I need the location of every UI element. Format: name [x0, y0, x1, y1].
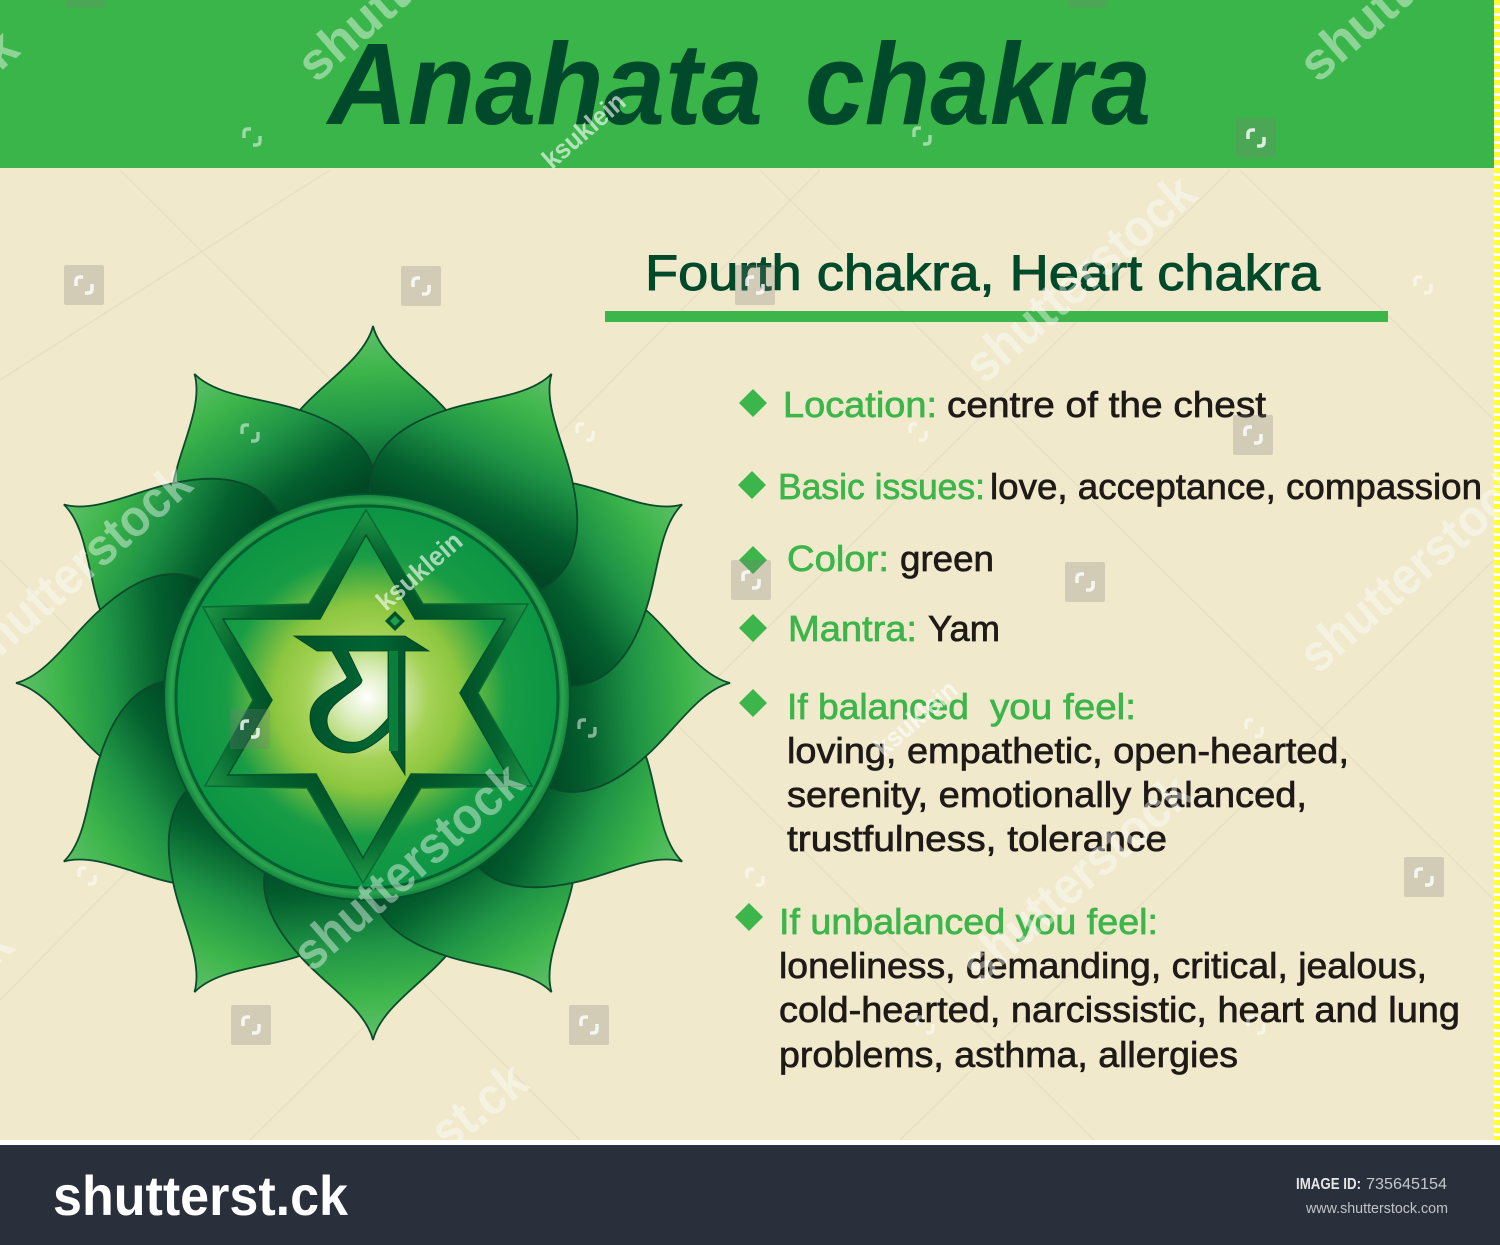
- outer ring: [164, 494, 570, 900]
- lotus petals: [9, 319, 737, 1047]
- list: basic issues: love, acceptance, compassion: [990, 466, 1482, 507]
- list: if balanced: loving, empathetic, open-hearted,: [787, 730, 1349, 771]
- watermark overlay: ksuklein: [868, 674, 963, 763]
- icon: diamond bullet: [738, 471, 766, 499]
- list: location: [739, 384, 1266, 425]
- list: if balanced: you feel:: [990, 686, 1136, 727]
- list: basic issues: Basic issues:: [778, 466, 985, 507]
- icon: diamond bullet: [739, 689, 767, 717]
- title: [325, 19, 1151, 149]
- icon: diamond bullet: [739, 614, 767, 642]
- image id: IMAGE ID:: [1296, 1176, 1361, 1193]
- list: color: [739, 538, 994, 579]
- watermark overlay: shutterstock: [954, 163, 1207, 394]
- bija mantra glyph: [294, 611, 429, 775]
- list: if balanced: trustfulness, tolerance: [787, 818, 1167, 859]
- list: mantra: Mantra:: [788, 608, 917, 649]
- image id: 735645154: [1366, 1176, 1447, 1193]
- list: mantra: Yam: [928, 608, 1000, 649]
- heading: fourth chakra: Fourth chakra, Heart chakra: [645, 245, 1320, 301]
- watermark overlay: ksuklein: [370, 526, 468, 617]
- inner disc: [176, 506, 558, 888]
- watermark overlay: ksuklein: [536, 86, 631, 175]
- list: basic issues: [738, 466, 1482, 507]
- list: color: Color:: [787, 538, 889, 579]
- glyph dot: [385, 611, 405, 631]
- list: if balanced: [739, 686, 1349, 859]
- title: Anahata: [325, 19, 763, 149]
- list: if balanced: serenity, emotionally balanced,: [787, 774, 1307, 815]
- heading underline: [605, 311, 1388, 322]
- watermark overlay: shutterstock: [950, 763, 1203, 994]
- list: if unbalanced: loneliness, demanding, critical, jealous,: [779, 945, 1427, 986]
- icon: diamond bullet: [739, 389, 767, 417]
- list: if unbalanced: cold-hearted, narcissistic, heart and lung: [779, 989, 1460, 1030]
- icon: diamond bullet: [735, 903, 763, 931]
- watermark overlay: st.ck: [420, 1051, 538, 1161]
- list: if balanced: If balanced: [787, 686, 969, 727]
- title: chakra: [805, 19, 1151, 149]
- list: location: Location:: [783, 384, 937, 425]
- image id: [1296, 1176, 1447, 1193]
- footer bar: [0, 1140, 1500, 1245]
- list: color: green: [900, 538, 994, 579]
- title banner: [0, 0, 1494, 168]
- list: mantra: [739, 608, 1000, 649]
- website: www.shutterstock.com: [1305, 1201, 1448, 1217]
- chakra mandala: [9, 319, 737, 1047]
- list: if unbalanced: If unbalanced you feel:: [779, 901, 1158, 942]
- list: if unbalanced: problems, asthma, allergies: [779, 1034, 1238, 1075]
- hexagram inner: [223, 535, 507, 858]
- watermark overlay: shutterstock: [282, 751, 535, 982]
- footer logo: shutterst.ck: [53, 1164, 349, 1227]
- hexagram outer band: [203, 510, 532, 883]
- list: if unbalanced: [735, 901, 1460, 1075]
- icon: diamond bullet: [739, 546, 767, 574]
- list: location: centre of the chest: [947, 384, 1266, 425]
- right edge strip: [1494, 0, 1500, 1145]
